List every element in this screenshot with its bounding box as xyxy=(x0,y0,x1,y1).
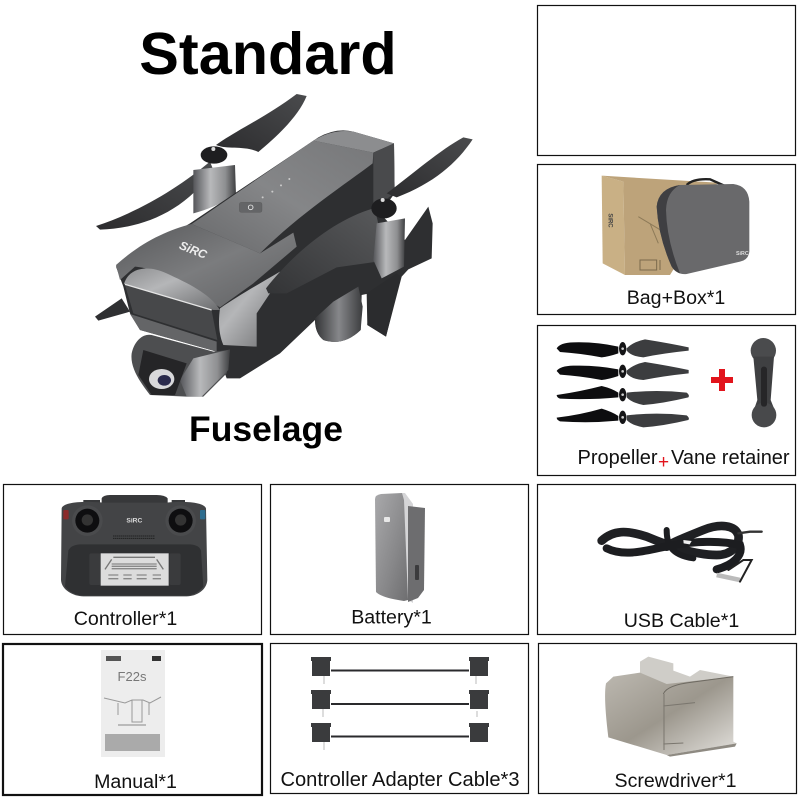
panel: controller xyxy=(4,484,262,634)
panel: controller adapter cables xyxy=(270,644,528,794)
label: Controller Adapter Cable*3 xyxy=(280,769,520,791)
panel: screwdriver xyxy=(538,644,796,794)
icon: adapter cables xyxy=(311,657,489,750)
label: Manual*1 xyxy=(94,771,177,793)
camera gimbal xyxy=(131,335,230,397)
icon: USB cable xyxy=(602,526,762,582)
icon: vane retainer xyxy=(751,338,776,427)
icon: manual booklet: F22s xyxy=(118,669,147,684)
icon: red plus xyxy=(711,369,733,391)
left rear propeller xyxy=(96,94,307,230)
icon: carton and carry bag: SiRC xyxy=(606,213,612,228)
drone body xyxy=(116,130,433,378)
panel: bag and box xyxy=(538,164,796,314)
icon: battery xyxy=(375,493,425,603)
drone body: SiRC xyxy=(177,238,209,262)
icon: carton and carry bag xyxy=(602,176,749,275)
panel: manual xyxy=(3,644,262,795)
label: Vane retainer xyxy=(671,447,790,469)
label: Screwdriver*1 xyxy=(615,770,736,792)
icon: silver cover xyxy=(605,657,737,757)
label: Controller*1 xyxy=(74,608,177,630)
label: Bag+Box*1 xyxy=(627,287,725,309)
front left small blade xyxy=(95,298,130,321)
icon: four propellers xyxy=(557,339,689,427)
icon: carton and carry bag: SiRC xyxy=(736,251,749,257)
label: Propeller xyxy=(578,447,658,469)
panel: propellers and vane retainer xyxy=(538,326,796,476)
title: Standard xyxy=(139,20,397,87)
label: Battery*1 xyxy=(351,606,432,628)
icon: folded drone xyxy=(95,94,473,397)
panel: empty box xyxy=(538,6,796,156)
icon: controller: SiRC xyxy=(126,518,142,525)
panel: USB cable xyxy=(538,484,796,634)
red plus in label: + xyxy=(658,452,669,473)
panel: battery xyxy=(270,484,528,634)
right front arm and propeller xyxy=(266,137,473,342)
icon: manual booklet xyxy=(101,650,165,757)
icon: controller xyxy=(61,495,207,596)
label: USB Cable*1 xyxy=(624,610,739,632)
heading: fuselage: Fuselage xyxy=(189,409,343,449)
